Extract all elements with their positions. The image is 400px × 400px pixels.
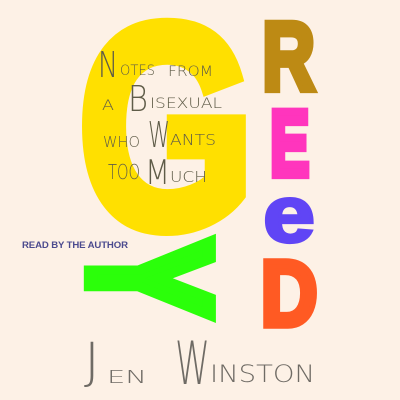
subtitle handwriting: B <box>128 79 148 120</box>
author name handwriting: INSTON <box>210 360 315 388</box>
title letter: R: R <box>262 3 315 111</box>
title letter: D: D <box>261 243 318 346</box>
subtitle handwriting: WHO <box>103 133 140 151</box>
subtitle handwriting: A <box>102 98 115 114</box>
title letter: lowercase e: e <box>263 171 315 259</box>
subtitle handwriting <box>98 45 222 193</box>
author name handwriting: J <box>84 332 100 390</box>
author name handwriting: W <box>175 329 210 399</box>
narrator credit: READ BY THE AUTHOR <box>22 240 128 251</box>
title letter: Y rotated: Y <box>53 240 245 317</box>
subtitle handwriting: ANTS <box>170 131 216 149</box>
subtitle handwriting: N <box>98 45 118 86</box>
author name handwriting <box>84 329 315 399</box>
subtitle handwriting: TOO <box>108 160 140 184</box>
author name handwriting: EN <box>107 367 147 388</box>
title letter: E: E <box>270 92 309 195</box>
subtitle handwriting: M <box>145 153 170 193</box>
subtitle handwriting: W <box>148 115 170 156</box>
subtitle handwriting: FROM <box>168 64 213 80</box>
subtitle handwriting: UCH <box>170 168 207 186</box>
subtitle handwriting: ISEXUAL <box>150 96 222 112</box>
subtitle handwriting: OTES <box>120 63 155 79</box>
